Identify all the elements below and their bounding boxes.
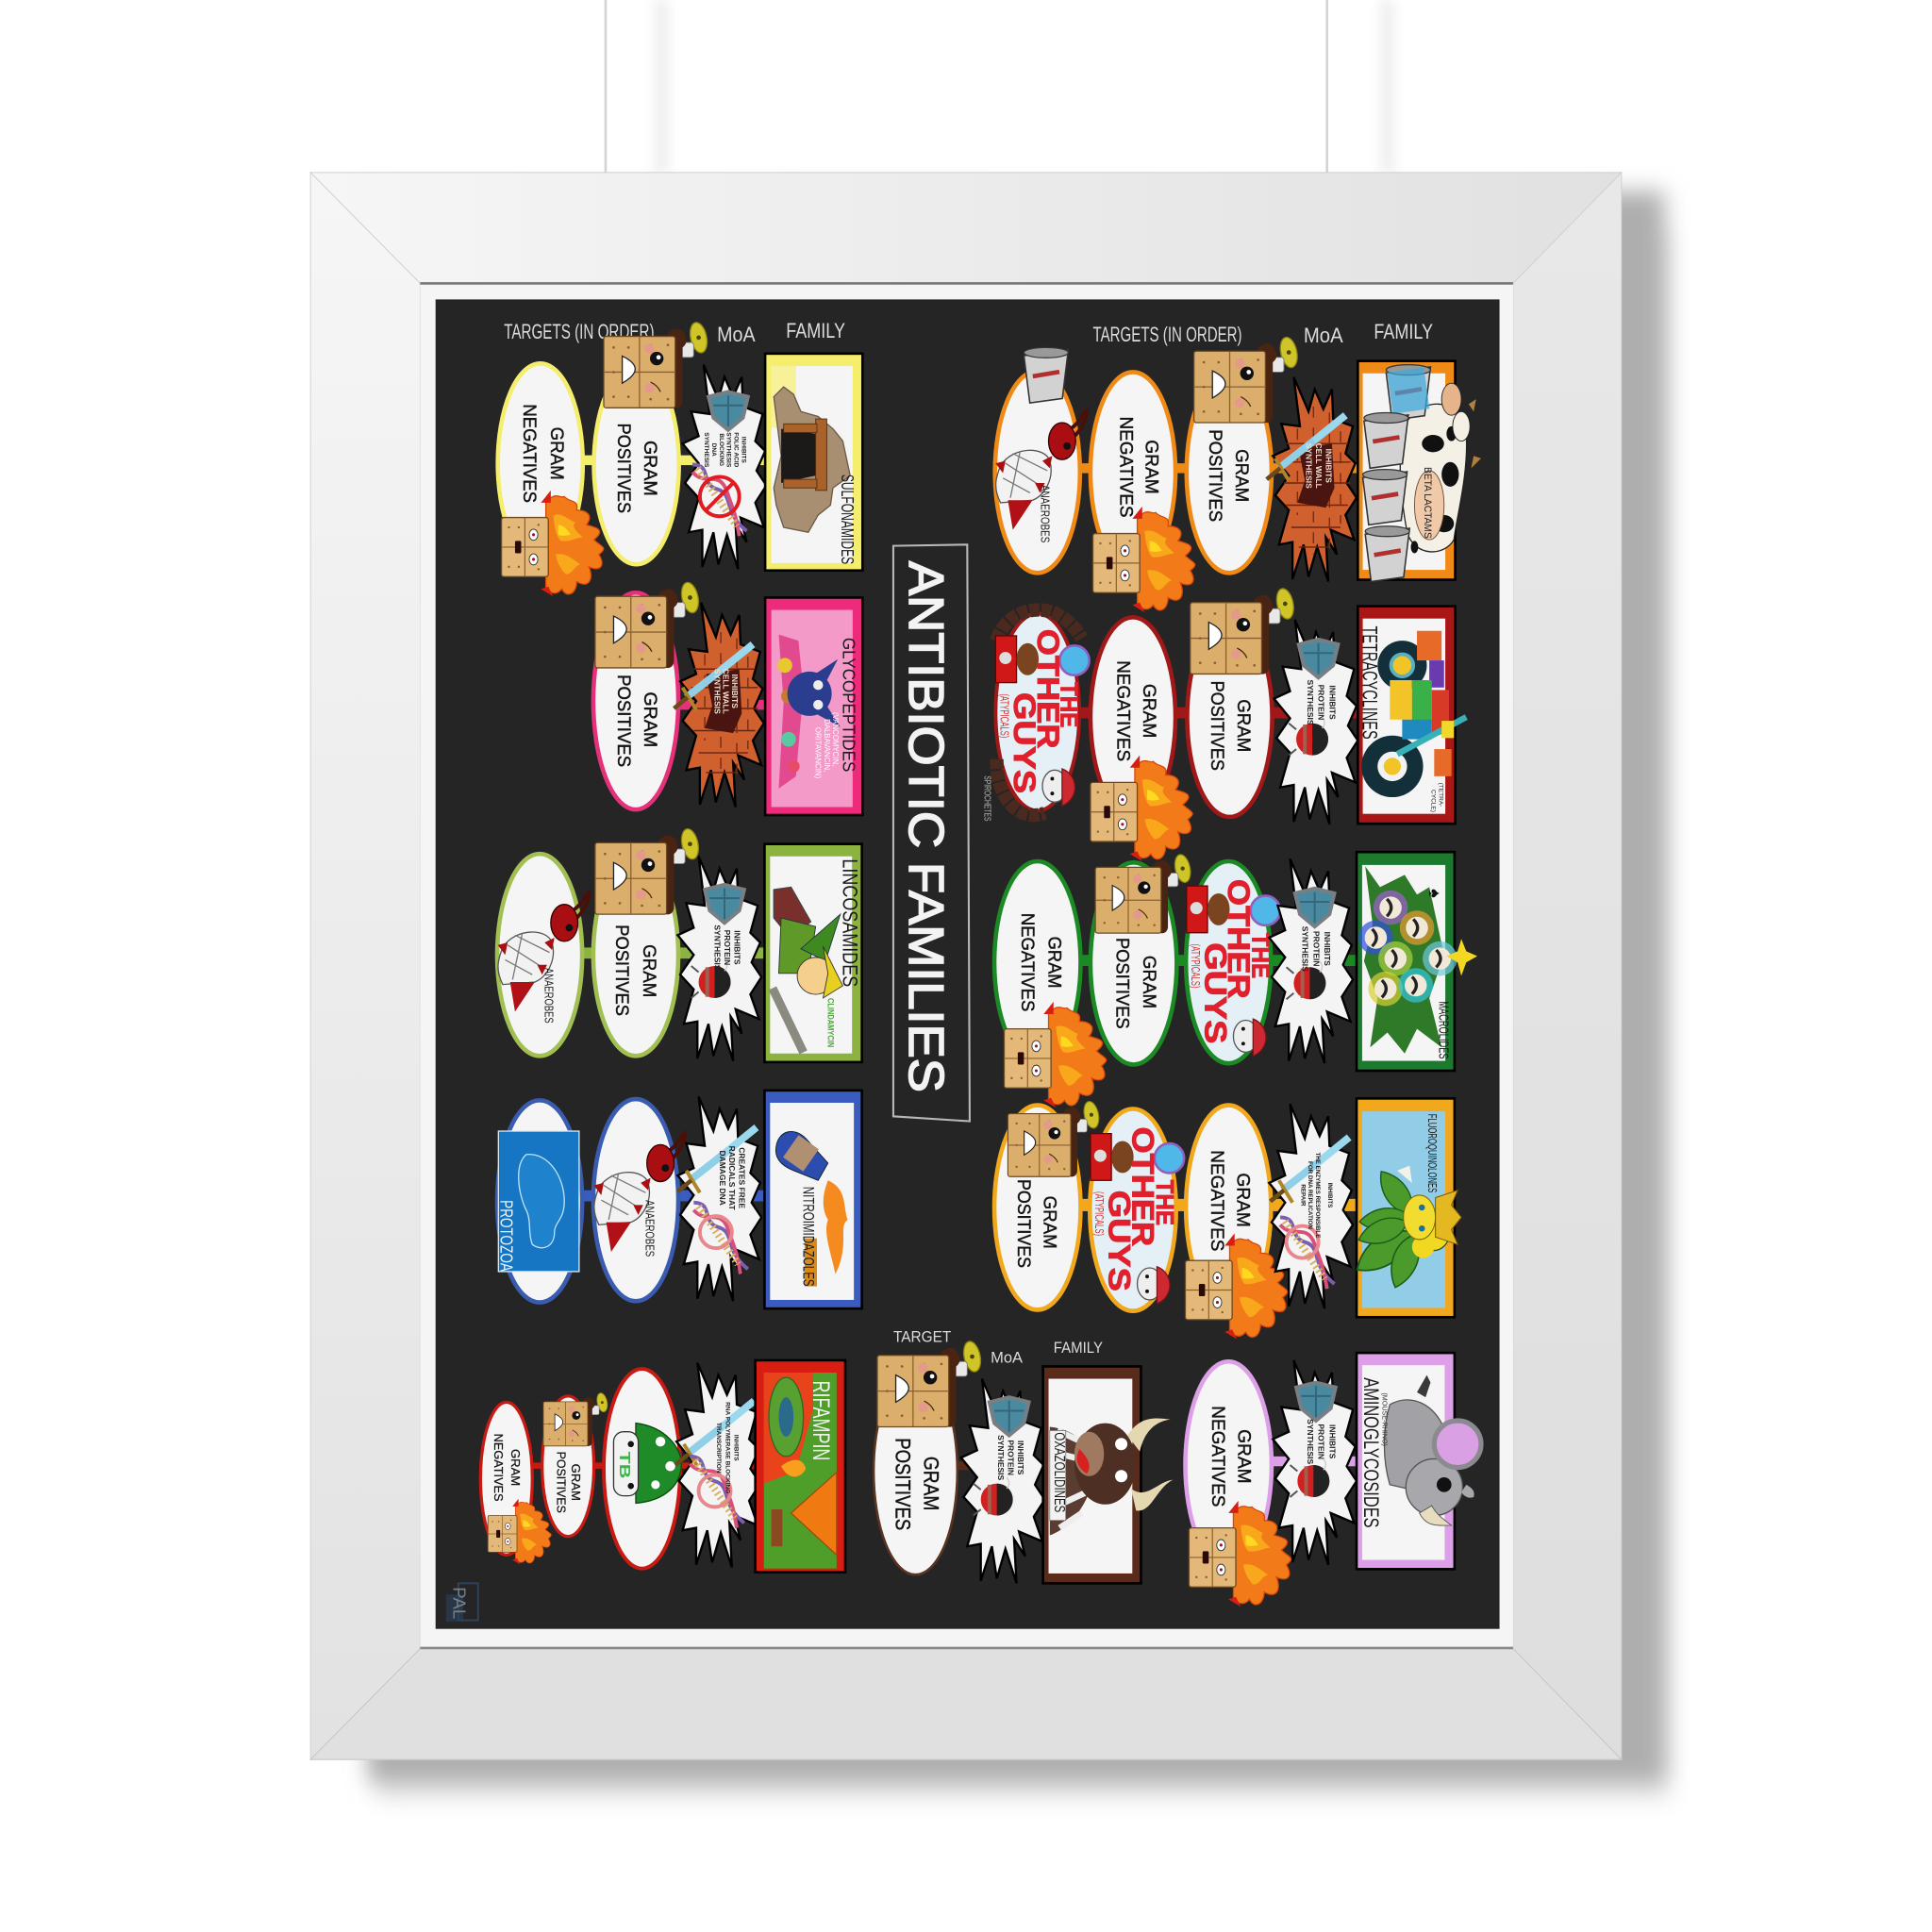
target: the other guys: THE <box>1151 1180 1179 1225</box>
MoA burst: INHIBITS <box>1326 1183 1333 1208</box>
target: anaerobes: ANAEROBES <box>541 968 556 1024</box>
MoA burst: SYNTHESIS <box>1301 926 1310 972</box>
target: the other guys: OTHER <box>1125 1126 1160 1246</box>
icon: angel smore <box>604 321 709 408</box>
target: gram positives <box>1013 1179 1059 1268</box>
panel: Oxazolidines <box>874 1340 1173 1583</box>
icon: devil smore <box>1091 756 1192 861</box>
family card: Rifampin: RIFAMPIN <box>808 1381 833 1460</box>
target: gram negatives: GRAM <box>1141 440 1162 494</box>
MoA burst: brick wall <box>1267 377 1357 581</box>
family card: Oxazolidines: OXAZOLIDINES <box>1051 1432 1067 1512</box>
target: anaerobes <box>498 891 589 1024</box>
MoA burst: SYNTHESIS <box>1306 1419 1315 1465</box>
family card: Lincosamides: LINCOSAMIDES <box>838 858 861 987</box>
target: the other guys <box>1091 1126 1184 1304</box>
icon: angel smore <box>877 1340 983 1427</box>
family card: Lincosamides: CLINDAMYCIN <box>826 998 836 1047</box>
MoA burst: CREATES FREE <box>738 1147 747 1208</box>
family card: Tetracyclines: (TETRA- <box>1438 783 1444 807</box>
MoA burst <box>1269 858 1353 1063</box>
family card: Macrolides: ♠ <box>1425 889 1445 898</box>
target: the other guys: GUYS <box>1103 1191 1138 1291</box>
target: gram negatives <box>519 404 567 503</box>
target: gram negatives: NEGATIVES <box>1017 913 1038 1011</box>
family card: Glycopeptides: ORITAVANCIN) <box>814 727 823 779</box>
family card: Lincosamides <box>764 844 862 1062</box>
target: gram negatives: GRAM <box>1139 684 1159 738</box>
target: gram negatives: NEGATIVES <box>519 404 540 503</box>
panel: Fluoroquinolones <box>994 1098 1461 1340</box>
family card: Nitroimidazoles <box>764 1091 862 1308</box>
MoA burst: INHIBITS <box>732 1435 739 1461</box>
panel: Macrolides <box>994 852 1477 1108</box>
MoA burst: DAMAGE DNA <box>718 1150 727 1206</box>
target: gram positives: GRAM <box>1139 956 1159 1008</box>
family card: Rifampin <box>756 1360 845 1573</box>
MoA burst <box>961 1379 1045 1583</box>
target: the other guys: THE <box>1056 682 1084 727</box>
target: gram positives: GRAM <box>569 1464 583 1501</box>
target: gram positives: GRAM <box>1233 699 1254 752</box>
MoA burst: PROTEIN <box>1311 931 1321 967</box>
family card: Aminoglycosides <box>1357 1353 1481 1569</box>
poster background <box>436 299 1500 1629</box>
target: the other guys: OTHER <box>1031 629 1066 748</box>
family card: Nitroimidazoles: NITROIMIDAZOLES <box>800 1187 818 1287</box>
MoA burst: INHIBITS <box>1323 932 1332 966</box>
panel: Tetracyclines <box>982 587 1466 861</box>
target: gram negatives: GRAM <box>1232 1173 1253 1227</box>
target: gram positives: GRAM <box>1231 449 1252 502</box>
MoA burst: INHIBITS <box>740 437 746 463</box>
target: gram positives: POSITIVES <box>613 675 634 767</box>
MoA burst: FOLIC ACID <box>732 432 739 468</box>
target: gram negatives: GRAM <box>1044 937 1065 989</box>
icon: small devil smore <box>488 1499 551 1564</box>
target: gram positives: POSITIVES <box>611 924 632 1016</box>
target: protozoa: PROTOZOA <box>496 1200 516 1273</box>
MoA burst: INHIBITS <box>732 930 741 965</box>
header: oxazolidines: TARGET <box>893 1327 951 1345</box>
target: gram negatives: NEGATIVES <box>1207 1150 1227 1251</box>
target: the other guys: (ATYPICALS) <box>1092 1191 1107 1236</box>
target: the other guys <box>995 629 1090 806</box>
MoA burst: BLOCKING <box>718 433 724 466</box>
MoA burst <box>1274 620 1357 824</box>
target: gram negatives <box>1113 660 1159 761</box>
icon: devil smore <box>1004 1002 1107 1108</box>
icon: devil smore <box>1185 1233 1288 1340</box>
MoA burst: brick wall <box>674 603 764 808</box>
header: left column: TARGETS (IN ORDER) <box>504 320 655 343</box>
target: gram negatives: NEGATIVES <box>1115 416 1136 518</box>
target: gram positives: POSITIVES <box>1207 681 1227 771</box>
panel: Lincosamides <box>497 827 862 1062</box>
target: gram positives: POSITIVES <box>554 1452 568 1513</box>
header: right column: TARGETS (IN ORDER) <box>1093 323 1242 346</box>
logo: PAL: PAL <box>450 1587 470 1619</box>
target: the other guys: GUYS <box>1198 942 1233 1043</box>
target: anaerobes: ANAEROBES <box>642 1200 657 1257</box>
MoA burst: PROTEIN <box>1317 1424 1326 1459</box>
header: oxazolidines: MoA <box>991 1349 1024 1367</box>
family card: Tetracyclines <box>1357 607 1466 824</box>
MoA burst <box>1273 1360 1357 1565</box>
target: gram positives: POSITIVES <box>613 424 634 513</box>
target: gram positives <box>554 1452 583 1513</box>
target: the other guys: GUYS <box>1008 692 1042 793</box>
target: anaerobes <box>995 347 1087 543</box>
MoA burst: THE ENZYMES RESPONSIBLE <box>1314 1152 1321 1238</box>
family card: Sulfonamides: SULFONAMIDES <box>838 475 858 564</box>
MoA burst: brick wall: CELL WALL <box>722 669 731 714</box>
header: right column: FAMILY <box>1374 320 1433 343</box>
panel: Rifampin <box>480 1360 845 1573</box>
icon: angel smore <box>1008 1100 1101 1176</box>
target: gram positives: GRAM <box>1039 1196 1059 1249</box>
MoA burst: PROTEIN <box>1006 1440 1015 1475</box>
panel: Glycopeptides <box>593 581 862 815</box>
target: gram positives <box>613 424 660 513</box>
MoA burst: brick wall: INHIBITS <box>730 675 740 708</box>
icon: small angel smore <box>543 1392 609 1446</box>
family card: Oxazolidines <box>1043 1366 1173 1583</box>
target: gram positives: POSITIVES <box>1013 1179 1034 1268</box>
icon: devil smore <box>1093 507 1195 612</box>
target: gram positives <box>1207 681 1254 771</box>
target: gram negatives: NEGATIVES <box>1113 660 1134 761</box>
MoA burst: FOR DNA REPLICATION <box>1307 1161 1313 1229</box>
icon: angel smore <box>1095 853 1192 933</box>
target: gram positives <box>891 1438 943 1530</box>
title: ANTIBIOTIC FAMILIES <box>898 561 953 1092</box>
target: gram negatives <box>491 1434 523 1502</box>
MoA burst: RADICALS THAT <box>727 1146 737 1211</box>
target: gram negatives <box>1115 416 1162 518</box>
header: left column <box>504 319 845 346</box>
MoA burst: brick wall: SYNTHESIS <box>1304 443 1313 489</box>
target: gram positives: GRAM <box>639 944 659 997</box>
MoA burst: brick wall: CELL WALL <box>1314 443 1324 489</box>
MoA burst <box>677 857 761 1061</box>
panel: Sulfonamides <box>498 321 862 596</box>
target: gram negatives: NEGATIVES <box>1208 1406 1228 1507</box>
target: anaerobes: ANAEROBES <box>1039 485 1053 543</box>
family card: Macrolides: MACROLIDES <box>1436 1001 1451 1059</box>
target: gram positives <box>611 924 659 1016</box>
MoA burst <box>675 1363 760 1567</box>
MoA burst <box>683 365 766 569</box>
family card: Aminoglycosides: (MOUSE-RHINO) <box>1380 1392 1388 1446</box>
target: gram positives <box>1111 938 1159 1029</box>
header: left column: MoA <box>717 323 756 346</box>
icon: angel smore <box>595 581 701 668</box>
icon: angel smore <box>1194 336 1300 423</box>
target: the other guys: (ATYPICALS) <box>998 693 1012 738</box>
MoA burst: TRANSCRIPTION <box>715 1423 722 1474</box>
picture frame <box>310 173 1622 1760</box>
family card: Tetracyclines: CYCLE) <box>1430 790 1437 812</box>
target: gram negatives: NEGATIVES <box>491 1434 506 1502</box>
MoA burst: DNA <box>710 443 717 457</box>
target: gram positives: POSITIVES <box>1205 429 1225 522</box>
MoA burst: brick wall: SYNTHESIS <box>713 669 723 714</box>
icon: angel smore <box>595 827 701 914</box>
target: gram positives: POSITIVES <box>1111 938 1132 1029</box>
MoA burst: PROTEIN <box>1317 685 1326 720</box>
target: gram negatives <box>1208 1406 1255 1507</box>
family card: Tetracyclines: TETRACYCLINES <box>1358 626 1382 740</box>
target: the other guys: OTHER <box>1222 879 1257 999</box>
target: gram positives <box>613 675 660 767</box>
target: TB mushroom <box>613 1424 681 1503</box>
target: anaerobes <box>594 1131 685 1257</box>
logo: PAL <box>446 1583 478 1622</box>
header: right column: MoA <box>1304 324 1343 347</box>
family card: Beta Lactams: BETA LACTAMS <box>1422 467 1433 539</box>
target: the other guys: (ATYPICALS) <box>1189 943 1203 989</box>
spirochete chains <box>997 609 1082 815</box>
target: gram positives: GRAM <box>920 1457 943 1510</box>
icon: devil smore <box>502 491 604 596</box>
family card: Beta Lactams <box>1357 361 1481 581</box>
family card: Glycopeptides <box>765 597 862 815</box>
target: gram negatives: GRAM <box>546 427 567 480</box>
target: gram positives: GRAM <box>640 691 660 747</box>
MoA burst: REPAIR <box>1299 1184 1306 1207</box>
target: protozoa <box>496 1131 579 1273</box>
header: oxazolidines: FAMILY <box>1054 1339 1103 1357</box>
target: the other guys <box>1187 879 1280 1056</box>
MoA burst: SYNTHESIS <box>996 1435 1006 1480</box>
family card: Aminoglycosides: AMINOGLYCOSIDES <box>1359 1377 1383 1528</box>
family card: Macrolides <box>1357 852 1477 1071</box>
target: gram negatives: GRAM <box>508 1449 523 1486</box>
family card: Glycopeptides: (VANCOMYCIN, <box>831 712 840 766</box>
hanger strips <box>605 0 1393 174</box>
panel: Nitroimidazoles <box>496 1091 862 1308</box>
target: the other guys: THE <box>1247 933 1275 978</box>
MoA burst: PROTEIN <box>723 930 732 965</box>
icon: angel smore <box>1191 587 1296 675</box>
MoA burst <box>1269 1104 1353 1308</box>
target: gram positives <box>1205 429 1252 522</box>
MoA burst: SYNTHESIS <box>713 924 723 971</box>
title <box>893 544 970 1122</box>
target: gram positives: GRAM <box>640 441 660 496</box>
MoA burst: brick wall: INHIBITS <box>1324 449 1333 483</box>
family card: Glycopeptides: DALBAVANCIN, <box>823 719 831 772</box>
frame shadow <box>369 191 1670 1799</box>
family card: Fluoroquinolones: FLUOROQUINOLONES <box>1425 1114 1440 1192</box>
family card: Glycopeptides: GLYCOPEPTIDES <box>839 638 858 772</box>
target: gram negatives <box>1017 913 1065 1011</box>
panel: Beta Lactams <box>995 336 1481 612</box>
header: right column <box>1093 320 1433 347</box>
panel: Aminoglycosides <box>1185 1353 1481 1607</box>
MoA burst: INHIBITS <box>1016 1441 1025 1475</box>
MoA burst: SYNTHESIS <box>1306 679 1315 725</box>
target: gram positives: POSITIVES <box>891 1438 915 1530</box>
family card: Sulfonamides <box>765 354 862 571</box>
MoA burst: INHIBITS <box>1327 685 1337 720</box>
target: TB mushroom: TB <box>616 1452 632 1478</box>
MoA burst: SYNTHESIS <box>703 432 709 468</box>
header: left column: FAMILY <box>786 319 845 342</box>
MoA burst: SYNTHESIS <box>725 432 732 468</box>
MoA burst <box>677 1096 761 1301</box>
MoA burst: RNA POLYMERASE BLOCKING <box>724 1402 730 1493</box>
target: gram negatives <box>1207 1150 1253 1251</box>
target: gram negatives: GRAM <box>1234 1429 1255 1484</box>
family card: Fluoroquinolones <box>1349 1098 1461 1317</box>
icon: devil smore <box>1189 1501 1291 1607</box>
MoA burst: INHIBITS <box>1327 1424 1337 1459</box>
header: oxazolidines <box>893 1327 1103 1367</box>
label: spirochetes: SPIROCHETES <box>982 775 992 822</box>
